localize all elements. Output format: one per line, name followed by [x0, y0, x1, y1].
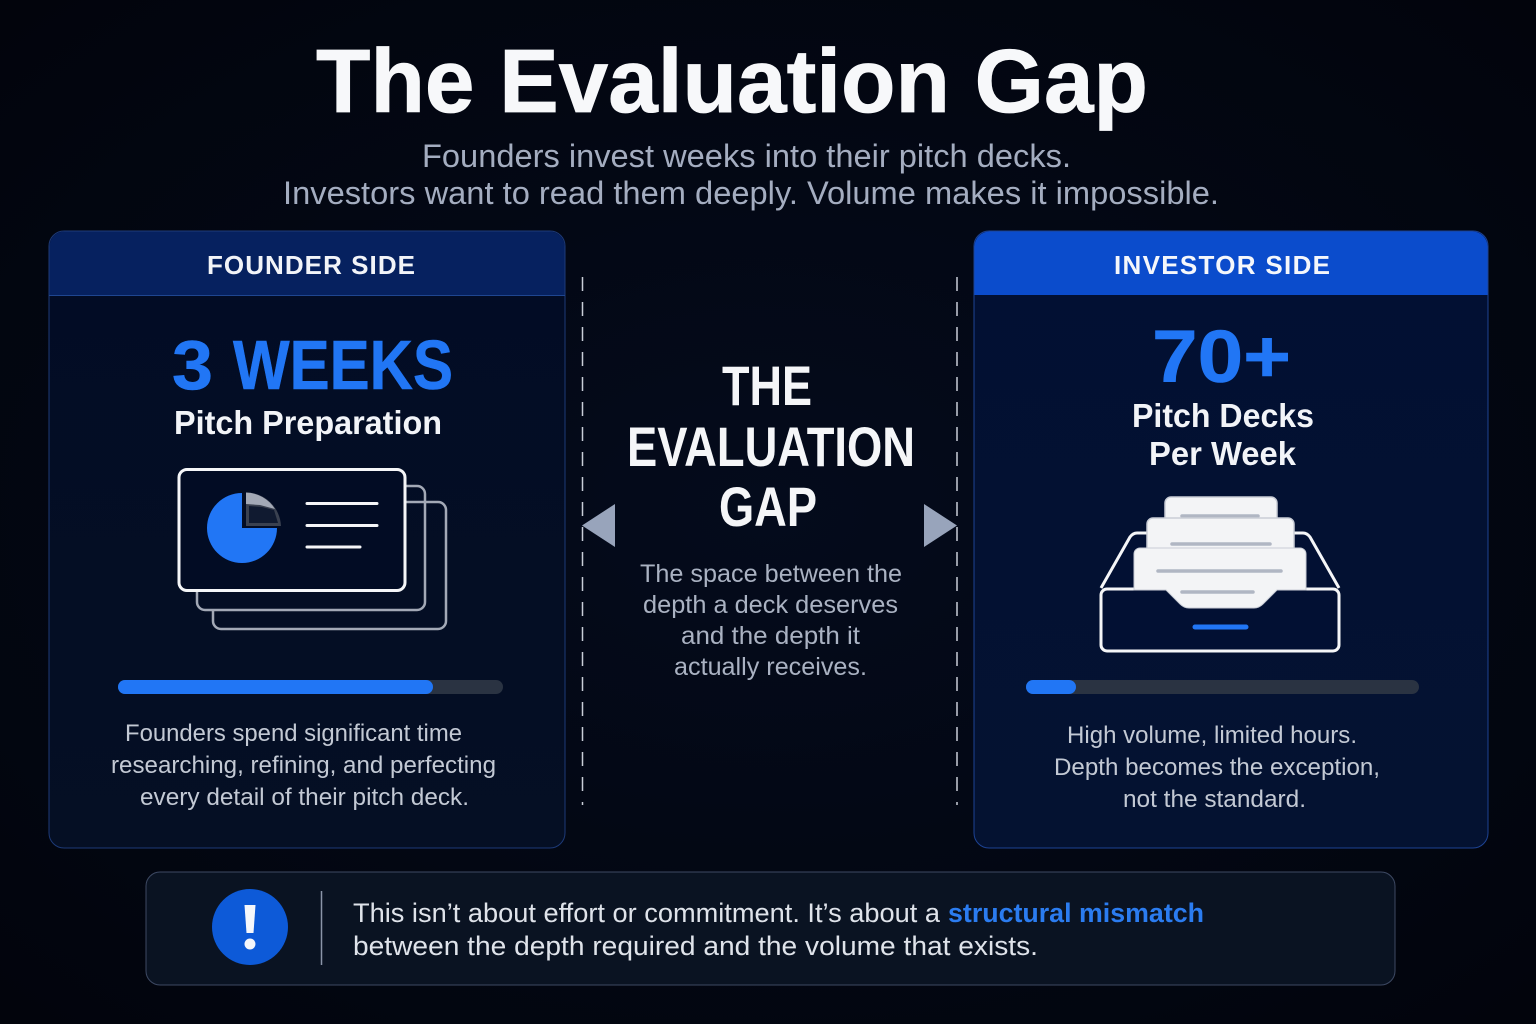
founder description: [111, 720, 496, 811]
icon: stacked slides with pie chart: [179, 470, 446, 629]
callout: structural mismatch: [146, 872, 1395, 985]
founder header band: [49, 232, 565, 296]
founder stat label: Pitch Preparation: [174, 404, 442, 441]
center description: depth a deck deserves: [643, 591, 898, 619]
investor progress bar: [1026, 680, 1419, 694]
panel: founder side: [49, 231, 565, 848]
investor description: Depth becomes the exception,: [1054, 754, 1380, 781]
icon: inbox tray with documents: [1101, 497, 1339, 651]
founder progress bar: [118, 680, 503, 694]
founder header band: FOUNDER SIDE: [207, 250, 415, 280]
subtitle: [283, 138, 1219, 211]
center heading: [627, 354, 915, 538]
arrow: right: [924, 504, 957, 547]
center description: The space between the: [640, 560, 902, 588]
subtitle: Founders invest weeks into their pitch decks.: [422, 138, 1071, 174]
center heading: GAP: [719, 475, 817, 538]
callout text: [353, 898, 1204, 961]
callout text: This isn’t about effort or commitment. It’s about a: [353, 898, 941, 928]
founder stat: 3 weeks: 3: [172, 326, 213, 404]
founder description: Founders spend significant time: [125, 720, 462, 747]
callout text: structural mismatch: [948, 898, 1204, 928]
investor header band: [974, 232, 1488, 295]
investor stat label: Pitch Decks: [1132, 397, 1314, 434]
investor header band: INVESTOR SIDE: [1114, 250, 1330, 280]
subtitle: Investors want to read them deeply. Volume makes it impossible.: [283, 175, 1219, 211]
center description: [640, 560, 902, 681]
arrow: left: [582, 504, 615, 547]
panel: center evaluation gap: [582, 277, 957, 805]
founder description: researching, refining, and perfecting: [111, 752, 496, 779]
callout text: between the depth required and the volume that exists.: [353, 931, 1038, 961]
center description: and the depth it: [681, 622, 860, 650]
center heading: EVALUATION: [627, 415, 915, 478]
center heading: THE: [722, 354, 812, 417]
investor stat label: Per Week: [1149, 435, 1297, 472]
founder stat: 3 weeks: [172, 326, 453, 404]
investor stat: 70+: 70+: [1152, 315, 1291, 398]
title: The Evaluation Gap: [316, 32, 1148, 132]
icon: exclamation mark: [212, 889, 288, 965]
founder description: every detail of their pitch deck.: [140, 784, 469, 811]
investor description: High volume, limited hours.: [1067, 722, 1357, 749]
founder stat: 3 weeks: WEEKS: [233, 326, 453, 404]
investor description: not the standard.: [1123, 786, 1306, 813]
center description: actually receives.: [674, 653, 867, 681]
investor stat label: [1132, 397, 1314, 472]
panel: investor side: [974, 231, 1488, 848]
investor description: [1054, 722, 1380, 813]
